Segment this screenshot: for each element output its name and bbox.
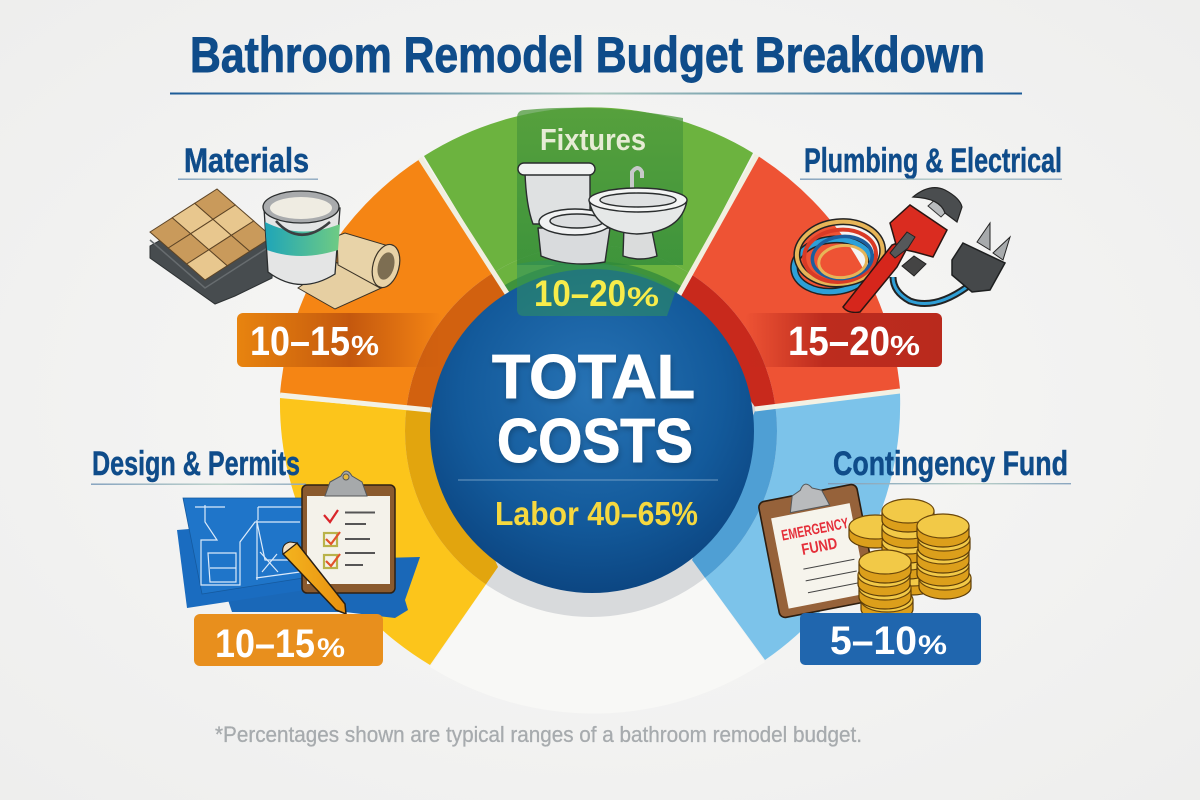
- segment: design and permits: [280, 398, 498, 665]
- segment: fixtures: [424, 107, 753, 298]
- labor range: Labor 40–65%: [495, 495, 698, 532]
- panel: contingency fund: [756, 445, 1071, 665]
- segment: plumbing and electrical: [680, 156, 900, 407]
- design range: 10–15: [215, 622, 315, 666]
- panel: plumbing and electrical: [745, 142, 1062, 367]
- title: Bathroom Remodel Budget Breakdown: [190, 27, 985, 83]
- icon: wires, wrench and plug: [790, 188, 1010, 312]
- plumbing range: 15–20: [788, 318, 890, 364]
- icon: blueprints, clipboard and pencil: [177, 471, 420, 618]
- center heading: COSTS: [497, 407, 693, 476]
- icon: sink: [589, 168, 687, 259]
- materials range: %: [351, 330, 379, 361]
- segment: materials: [280, 159, 510, 409]
- contingency range: %: [918, 630, 947, 660]
- panel: design and permits: [91, 445, 420, 666]
- contingency heading: Contingency Fund: [833, 445, 1068, 483]
- icon: tiles, paint bucket and roll: [150, 189, 404, 309]
- panel: fixtures: [517, 108, 687, 316]
- infographic canvas: [91, 35, 1071, 747]
- materials range: [237, 313, 442, 367]
- center heading: TOTAL: [492, 343, 695, 412]
- plumbing range: [745, 313, 942, 367]
- fixtures range: 10–20: [534, 273, 626, 314]
- icon: emergency fund clipboard: [756, 475, 879, 618]
- materials range: 10–15: [250, 318, 350, 364]
- segment: labor remainder: [430, 560, 765, 714]
- inner darker ring: [405, 246, 777, 617]
- icon: toilet: [518, 163, 611, 264]
- center circle: total costs: [430, 269, 754, 593]
- icon: emergency fund clipboard: FUND: [800, 535, 839, 559]
- contingency range: [800, 613, 981, 665]
- fixtures range: %: [627, 282, 659, 312]
- materials heading: Materials: [184, 142, 309, 180]
- design range: %: [317, 633, 345, 663]
- segment: contingency fund: [692, 393, 900, 660]
- contingency range: 5–10: [830, 619, 917, 663]
- plumbing heading: Plumbing & Electrical: [804, 142, 1062, 180]
- icon: emergency fund clipboard: EMERGENCY: [780, 515, 850, 545]
- pie chart: budget segments: [280, 107, 900, 714]
- plumbing range: %: [890, 330, 920, 361]
- icon: gold coin stacks: [849, 499, 971, 621]
- panel: materials: [150, 142, 442, 367]
- fixtures heading: Fixtures: [540, 122, 646, 157]
- center heading: [492, 343, 695, 476]
- design heading: Design & Permits: [92, 445, 300, 483]
- footnote: *Percentages shown are typical ranges of a bathroom remodel budget.: [215, 722, 862, 747]
- design range: [194, 614, 383, 666]
